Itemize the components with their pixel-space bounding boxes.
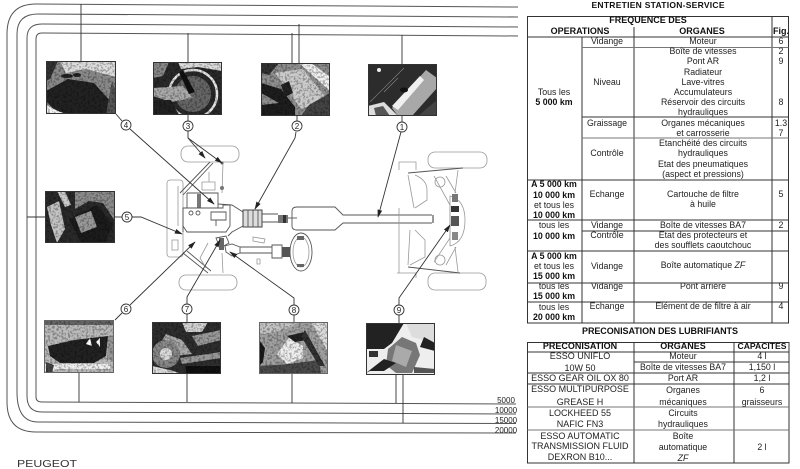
table: maintenance schedule (528, 15, 789, 323)
lubricants: product names: ESSO AUTOMATIC (540, 431, 620, 441)
row group: every 5 000 km: Moteur (689, 36, 717, 46)
rail connectors (27, 4, 403, 423)
lubricants header: CAPACITES (737, 341, 787, 351)
photo 1 (368, 64, 437, 116)
row: air filter: tous les (539, 302, 570, 312)
callout 2: 2 (295, 122, 300, 131)
photo 9 (366, 323, 435, 375)
callout 6: 6 (124, 305, 129, 314)
row: rear axle: 15 000 km (533, 291, 575, 301)
mileage rails (7, 4, 518, 433)
mileage labels (495, 396, 518, 435)
callout 5: 5 (125, 213, 130, 222)
row: every 10 000 km: Vidange (591, 220, 623, 230)
row: oil filter: et tous les (534, 200, 575, 210)
lubricants: product names: ESSO GEAR OIL OX 80 (531, 373, 629, 383)
row group: every 5 000 km: Etat des pneumatiques (658, 159, 749, 169)
lubricants: product names: 10W 50 (564, 363, 596, 373)
heading: entretien station-service: ENTRETIEN STATION-SERVICE (592, 0, 725, 10)
heading: preconisation des lubrifiants: PRECONISATION DES LUBRIFIANTS (582, 326, 738, 336)
row: every 10 000 km: Boîte de vitesses BA7 (660, 220, 746, 230)
table header (551, 15, 789, 36)
row: oil filter: Echange (590, 189, 624, 199)
callout 4: 4 (124, 121, 129, 130)
row: oil filter: à huile (690, 199, 716, 209)
row group: every 5 000 km: Réservoir des circuits (661, 97, 746, 107)
row group: every 5 000 km: 2 (779, 46, 784, 56)
lubricants: capacities: 6 (760, 385, 765, 395)
rear axle (397, 152, 487, 290)
row: automatic gearbox: A 5 000 km (531, 251, 577, 261)
lubricants: capacities (742, 351, 783, 452)
row: automatic gearbox: Vidange (591, 261, 623, 271)
lubricants: components (640, 351, 726, 463)
mileage labels: 15000 (495, 416, 518, 425)
lubricants: capacities: 1,150 l (749, 362, 775, 372)
table grid (528, 16, 788, 323)
row: every 10 000 km: tous les (539, 220, 570, 230)
row group: every 5 000 km: 8 (779, 97, 784, 107)
row: oil filter: 5 (779, 189, 784, 199)
row: air filter: 20 000 km (533, 312, 575, 322)
lubricants: product names: NAFIC FN3 (557, 419, 603, 429)
lubricants: product names: DEXRON B10... (548, 452, 612, 462)
callout 2 (255, 116, 302, 209)
row: rear axle: 9 (779, 281, 784, 291)
row group: every 5 000 km: Accumulateurs (674, 87, 733, 97)
lubricants: capacities: 2 l (757, 442, 767, 452)
row: every 10 000 km (533, 220, 784, 250)
row: every 10 000 km: 10 000 km (533, 231, 575, 241)
lubricants: product names: ESSO MULTIPURPOSE (531, 384, 629, 394)
mileage labels: 10000 (495, 406, 518, 415)
row group: every 5 000 km: 6 (779, 36, 784, 46)
row group: every 5 000 km: Niveau (593, 77, 621, 87)
callout 9: 9 (397, 306, 402, 315)
row group: every 5 000 km: hydrauliques (678, 148, 729, 158)
lubricants: capacities: 4 l (757, 351, 767, 361)
table header: ORGANES (679, 26, 725, 36)
row group: every 5 000 km: Boîte de vitesses (670, 46, 737, 56)
row: every 10 000 km: Etat des protecteurs et (659, 230, 748, 240)
callout 8: 8 (292, 306, 297, 315)
table: lubricants (528, 341, 789, 463)
lubricants: components: Boîte de vitesses BA7 (640, 362, 726, 372)
row: automatic gearbox: Boîte automatique ZF (661, 260, 746, 270)
row: air filter (533, 301, 784, 322)
row group: every 5 000 km: Vidange (591, 36, 623, 46)
lubricants: components: Boîte (673, 431, 693, 441)
mileage labels: 20000 (495, 426, 518, 435)
photo 5 (45, 191, 115, 243)
row: rear axle: Pont arrière (680, 281, 726, 291)
steering wheel (290, 233, 312, 271)
row: oil filter: 10 000 km (533, 210, 575, 220)
propeller shaft (292, 207, 432, 230)
photo 7 (152, 322, 221, 374)
row: air filter: 4 (779, 301, 784, 311)
callout 6 (115, 242, 195, 320)
row group: every 5 000 km: hydrauliques (678, 107, 729, 117)
row group: every 5 000 km: 5 000 km (535, 97, 573, 107)
row group: every 5 000 km: Lave-vitres (681, 77, 725, 87)
row group: every 5 000 km: Tous les (538, 87, 571, 97)
row group: every 5 000 km: 7 (779, 128, 784, 138)
lubricants: capacities: 1,2 l (754, 373, 770, 383)
lubricants: components: Port AR (668, 373, 698, 383)
row: air filter: Echange (590, 301, 624, 311)
photo 2 (261, 63, 330, 116)
lubricants: product names: LOCKHEED 55 (549, 408, 611, 418)
row group: every 5 000 km: et carrosserie (676, 128, 730, 138)
callout 1: 1 (400, 123, 405, 132)
lubricants: components: automatique (659, 442, 707, 452)
row: rear axle: tous les (539, 281, 570, 291)
row group: every 5 000 km: Graissage (587, 118, 627, 128)
row group: every 5 000 km: Etanchéité des circuits (659, 138, 748, 148)
lubricants: product names (531, 351, 629, 462)
photo 6 (44, 320, 114, 373)
table header: Fig. (773, 26, 789, 36)
row: every 10 000 km: des soufflets caoutchouc (655, 240, 752, 250)
callout 1 (378, 116, 407, 217)
lubricants grid (528, 342, 789, 463)
row group: every 5 000 km: Organes mécaniques (661, 118, 745, 128)
row group: every 5 000 km: 1.3 (775, 118, 787, 128)
photo 4 (46, 61, 116, 114)
row group: every 5 000 km: Pont AR (687, 56, 719, 66)
row: air filter: Elément de de filtre à air (655, 301, 751, 311)
lubricants: components: ZF (677, 453, 689, 463)
row: oil filter: Cartouche de filtre (667, 189, 739, 199)
callout 7: 7 (185, 305, 190, 314)
row: every 10 000 km: 2 (779, 220, 784, 230)
photo 8 (259, 322, 328, 374)
row: every 10 000 km: Contrôle (590, 230, 624, 240)
mileage labels: 5000 (497, 396, 515, 405)
front wheels (179, 146, 239, 290)
lubricants: components: mécaniques (659, 397, 707, 407)
lubricants: components: Moteur (669, 351, 697, 361)
callout 7 (182, 240, 220, 322)
lubricants: product names: ESSO UNIFLO (550, 351, 610, 361)
row: oil filter: A 5 000 km (531, 179, 577, 189)
lubricants header: ORGANES (660, 341, 706, 351)
lubricants: components: Circuits (668, 408, 698, 418)
callout 9 (394, 225, 450, 323)
lubricants: components: hydrauliques (658, 419, 709, 429)
car chassis diagram (167, 146, 487, 290)
callout 5 (115, 212, 182, 234)
row group: every 5 000 km: 9 (779, 56, 784, 66)
callout 4 (116, 114, 214, 204)
lubricants: components: Organes (666, 385, 700, 395)
row group: every 5 000 km: Radiateur (684, 67, 722, 77)
lubricants: capacities: graisseurs (742, 397, 783, 407)
row group: every 5 000 km: (aspect et pressions) (662, 169, 744, 179)
row: rear axle: Vidange (591, 281, 623, 291)
row: automatic gearbox (531, 251, 746, 281)
engine and gearbox (167, 162, 297, 273)
row group: every 5 000 km (535, 36, 787, 179)
row: rear axle (533, 281, 784, 301)
row: oil filter (531, 179, 784, 220)
lubricants: product names: GREASE H (557, 397, 603, 407)
lubricants: product names: TRANSMISSION FLUID (531, 441, 629, 451)
table header: FREQUENCE DES (609, 15, 687, 25)
row: oil filter: 10 000 km (533, 190, 575, 200)
row: automatic gearbox: 15 000 km (533, 271, 575, 281)
callout 3: 3 (186, 122, 191, 131)
callout 3 (183, 115, 222, 163)
photo 3 (153, 62, 222, 118)
row group: every 5 000 km: Contrôle (590, 148, 624, 158)
table header: OPERATIONS (551, 26, 609, 36)
callout 8 (230, 252, 299, 322)
lubricants header (543, 341, 787, 351)
lubricants header: PRECONISATION (543, 341, 617, 351)
row: automatic gearbox: et tous les (534, 261, 575, 271)
